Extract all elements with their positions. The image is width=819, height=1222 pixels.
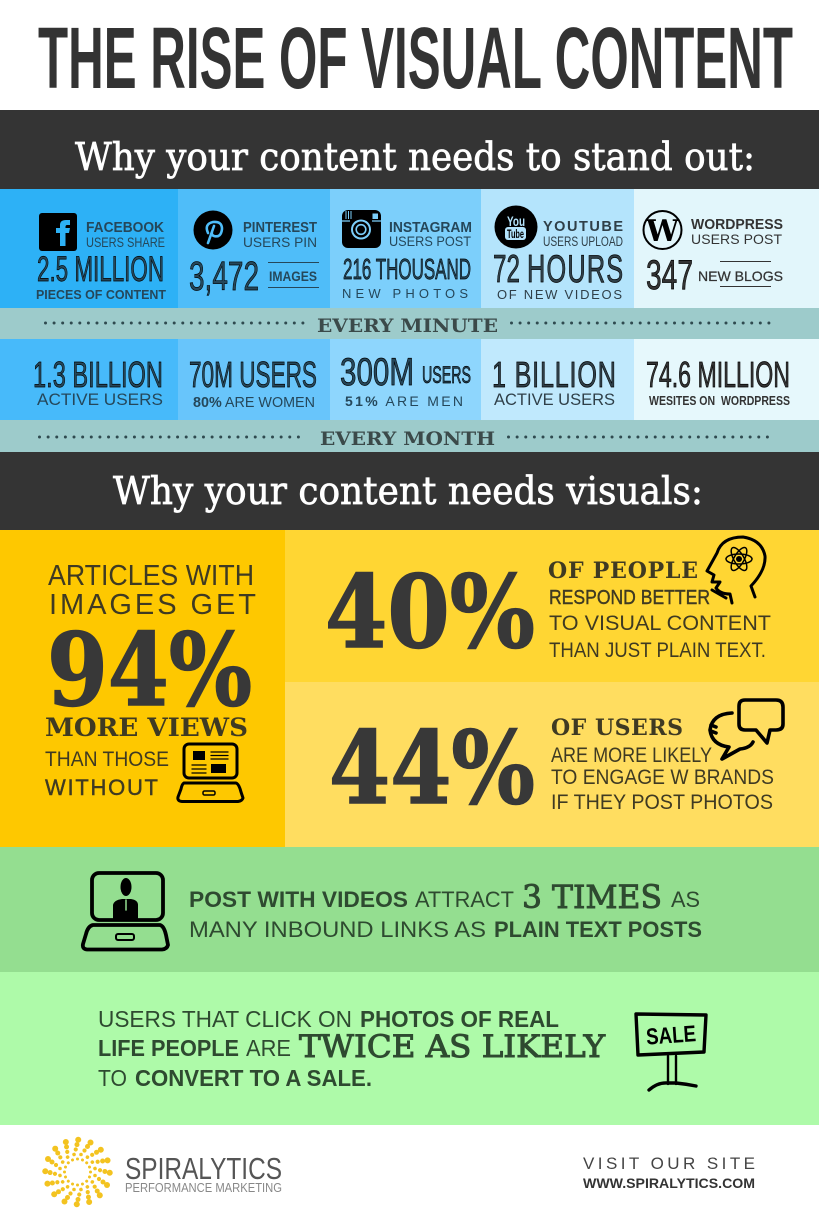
band: every month: EVERY MONTH (320, 429, 495, 450)
facebook users: 1.3 BILLION (33, 354, 163, 395)
pinterest stat (189, 210, 319, 299)
panel: 44 percent: TO ENGAGE W BRANDS (551, 766, 774, 789)
youtube users: ACTIVE USERS (494, 390, 615, 409)
wordpress stat: WORDPRESS (691, 217, 783, 233)
pinterest stat: IMAGES (269, 268, 317, 284)
panel: videos attract links: MANY INBOUND LINKS AS (189, 917, 486, 942)
panel: videos attract links (0, 847, 819, 972)
panel: videos attract links: 3 TIMES (522, 878, 662, 916)
pinterest users (189, 354, 317, 411)
instagram users: 300M (340, 351, 414, 394)
panel: 44 percent: 44% (329, 709, 535, 827)
instagram users (340, 351, 471, 409)
icon: pinterest (194, 210, 232, 250)
heading: why your content needs to stand out: Why your content needs to stand out: (75, 135, 755, 179)
heading: why your content needs visuals: Why your content needs visuals: (113, 469, 703, 513)
icon: sale sign (636, 1014, 706, 1090)
youtube stat: USERS UPLOAD (543, 234, 623, 249)
panel: 40 percent: RESPOND BETTER (549, 587, 710, 609)
youtube stat: HOURS (527, 246, 623, 290)
panel: 94 percent more views: IMAGES GET (49, 589, 256, 621)
facebook stat: USERS SHARE (86, 234, 165, 250)
panel: 94 percent more views: MORE VIEWS (45, 713, 248, 742)
instagram users: USERS (422, 362, 471, 389)
wordpress sites: WESITES ON WORDPRESS (649, 394, 790, 408)
panel: 94 percent more views: WITHOUT (45, 775, 158, 800)
instagram stat: 216 THOUSAND (343, 254, 471, 286)
panel: 40 percent (285, 530, 819, 682)
panel: 44 percent: IF THEY POST PHOTOS (551, 791, 773, 814)
instagram stat: INSTAGRAM (389, 220, 472, 236)
band: every month (0, 420, 819, 452)
panel: 40 percent: OF PEOPLE (548, 558, 698, 584)
band: every minute (0, 308, 819, 339)
panel: real life people: ARE (246, 1035, 291, 1061)
wordpress stat: USERS POST (691, 231, 782, 247)
icon: speech bubbles (710, 700, 783, 759)
logo wordmark (125, 1151, 282, 1195)
icon: laptop with article (178, 744, 243, 802)
facebook users: ACTIVE USERS (37, 390, 163, 409)
panel: footer (41, 1136, 755, 1208)
facebook stat (36, 213, 166, 302)
panel: real life people: TWICE AS LIKELY (299, 1029, 606, 1065)
panel: 44 percent: OF USERS (551, 715, 683, 741)
panel: videos attract links: AS (671, 887, 700, 912)
panel: 40 percent: TO VISUAL CONTENT (549, 611, 771, 635)
instagram stat: USERS POST (389, 233, 471, 249)
logo wordmark: PERFORMANCE MARKETING (125, 1181, 282, 1195)
website link (583, 1154, 755, 1191)
panel: 94 percent more views: ARTICLES WITH (48, 560, 254, 592)
pinterest stat: USERS PIN (243, 234, 317, 250)
website link: VISIT OUR SITE (583, 1154, 755, 1173)
icon: youtube (494, 206, 538, 248)
youtube users: 1 BILLION (492, 355, 616, 395)
panel: real life people (0, 972, 819, 1125)
facebook stat: PIECES OF CONTENT (36, 287, 166, 302)
panel: videos attract links: POST WITH VIDEOS (189, 887, 408, 912)
youtube stat: YOUTUBE (543, 219, 623, 235)
panel: 94 percent more views (0, 530, 285, 847)
pinterest users: 80% ARE WOMEN (193, 395, 315, 411)
panel: every month row (0, 339, 819, 420)
website link: WWW.SPIRALYTICS.COM (583, 1175, 755, 1191)
facebook users (33, 354, 163, 409)
icon: youtube: Tube (507, 227, 524, 241)
icon: head with atom (707, 537, 765, 603)
facebook stat: 2.5 MILLION (37, 250, 164, 289)
panel: videos attract links: PLAIN TEXT POSTS (494, 917, 702, 942)
panel: videos attract links: ATTRACT (415, 887, 514, 912)
panel: every minute row (0, 189, 819, 308)
icon: sale sign: SALE (645, 1020, 697, 1050)
pinterest stat: 3,472 (189, 253, 259, 299)
instagram stat (342, 210, 472, 301)
heading: why your content needs visuals (0, 452, 819, 530)
wordpress stat (644, 211, 783, 298)
heading: why your content needs to stand out (0, 110, 819, 189)
panel: 40 percent: THAN JUST PLAIN TEXT. (549, 638, 766, 662)
pinterest stat: PINTEREST (243, 220, 317, 236)
icon: spiralytics logo (41, 1136, 114, 1208)
logo wordmark: SPIRALYTICS (125, 1151, 282, 1186)
panel: 40 percent: 40% (325, 553, 535, 671)
panel: 44 percent (285, 682, 819, 847)
panel: 94 percent more views: 94% (47, 611, 252, 729)
youtube stat (493, 206, 623, 302)
wordpress sites (646, 354, 790, 408)
icon: youtube: You (507, 213, 525, 229)
instagram stat: NEW PHOTOS (342, 286, 468, 301)
panel: real life people: CONVERT TO A SALE. (135, 1065, 372, 1091)
youtube stat: 72 (493, 248, 520, 291)
facebook stat: FACEBOOK (86, 220, 165, 236)
panel: real life people: USERS THAT CLICK ON (98, 1006, 352, 1032)
band: every minute: EVERY MINUTE (317, 315, 498, 337)
wordpress stat: NEW BLOGS (698, 268, 783, 284)
icon: wordpress: W (645, 214, 680, 249)
icon: facebook (39, 213, 77, 251)
panel: real life people: PHOTOS OF REAL (360, 1006, 559, 1032)
wordpress stat: 347 (646, 251, 693, 298)
panel: real life people: LIFE PEOPLE (98, 1035, 239, 1061)
panel: 94 percent more views: THAN THOSE (45, 747, 169, 771)
instagram users: 51% ARE MEN (345, 393, 463, 409)
youtube stat: OF NEW VIDEOS (497, 287, 622, 302)
icon: instagram (342, 210, 381, 248)
pinterest users: 70M USERS (189, 354, 317, 395)
panel: real life people: TO (98, 1065, 127, 1091)
icon: laptop with video presenter (83, 873, 168, 950)
panel: 44 percent: ARE MORE LIKELY (551, 744, 712, 767)
